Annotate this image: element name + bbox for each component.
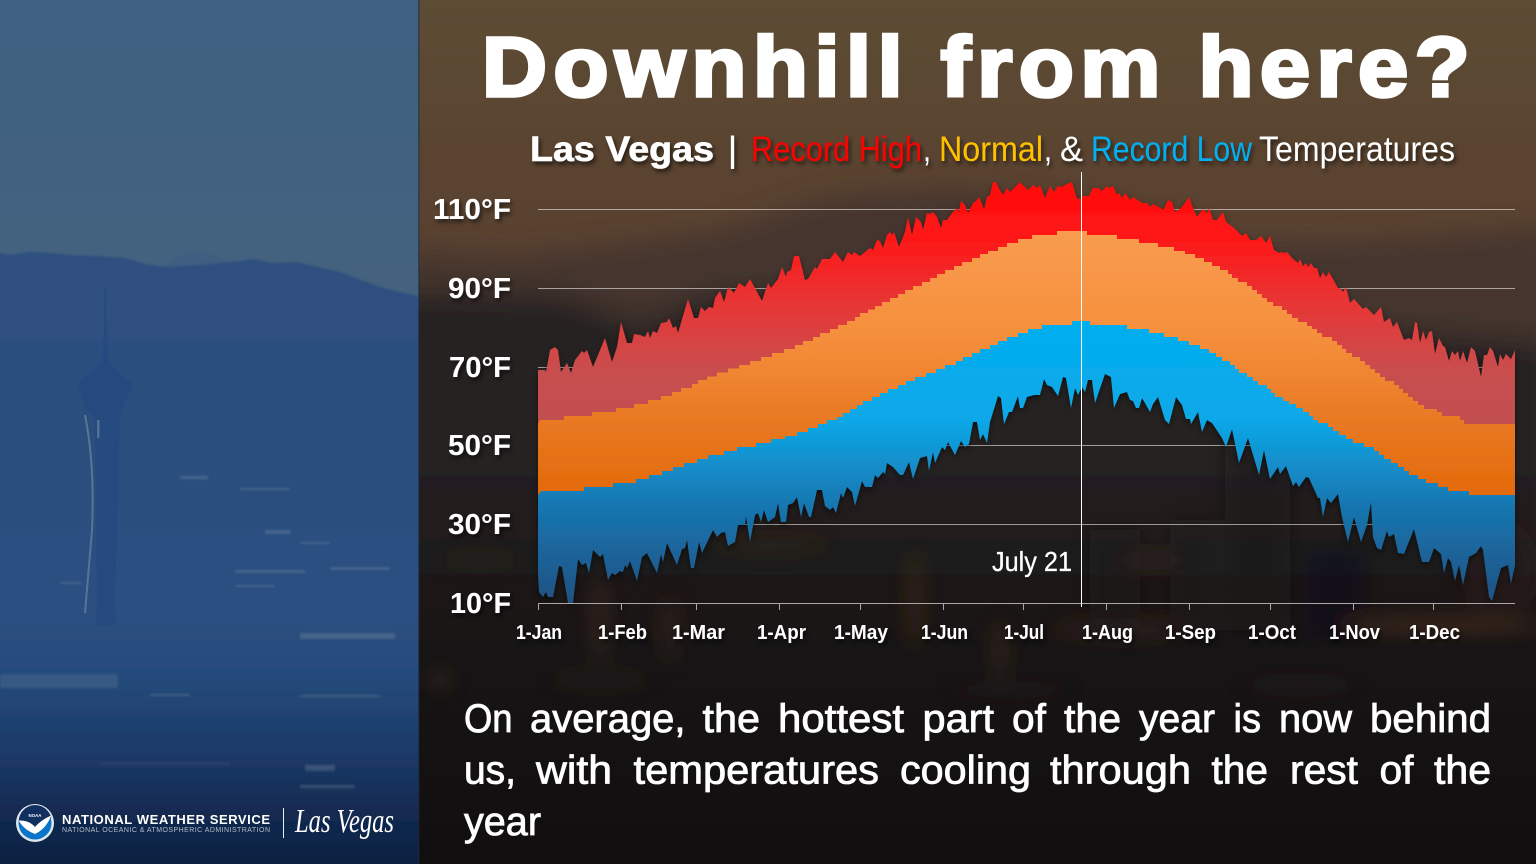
x axis month labels: 1-Jun [921, 622, 968, 644]
logo: National Weather Service Las Vegas: NATIONAL OCEANIC & ATMOSPHERIC ADMINISTRATION [62, 827, 270, 834]
body text: behind [1370, 697, 1491, 741]
body text: the [1212, 748, 1268, 792]
body text: year [1139, 697, 1215, 741]
subtitle: Record Low [1091, 130, 1253, 169]
x axis month labels: 1-Mar [672, 622, 725, 644]
body text: us, [464, 748, 516, 792]
y axis labels: 70°F [449, 352, 511, 384]
body text: rest [1290, 748, 1358, 792]
panel: blurred city background [380, 0, 1536, 864]
x axis month labels: 1-Aug [1082, 622, 1133, 644]
body text: the [1434, 748, 1491, 792]
script label: Las Vegas [294, 803, 394, 840]
x axis month labels: 1-Apr [757, 622, 806, 644]
subtitle: Record High [751, 130, 922, 169]
x axis month labels: 1-Oct [1248, 622, 1296, 644]
x axis month labels: 1-Nov [1329, 622, 1381, 644]
y axis labels: 110°F [433, 194, 511, 226]
logo: National Weather Service Las Vegas [16, 803, 394, 842]
band: record low [538, 280, 1515, 603]
x axis month labels [516, 622, 1460, 644]
body text: is [1234, 697, 1261, 741]
subtitle: Normal [939, 130, 1043, 169]
subtitle: | [729, 130, 736, 169]
x axis month labels: 1-Jan [516, 622, 562, 644]
y axis labels: 50°F [448, 430, 511, 462]
city lights [0, 476, 395, 788]
body text: On [464, 697, 512, 741]
body text [464, 697, 1491, 844]
annotation: July 21: July 21 [992, 546, 1072, 577]
marker line: July 21 [1081, 172, 1082, 607]
icon: NOAA seal: NOAA [28, 813, 42, 818]
subtitle: , [1044, 130, 1052, 169]
wordmark: NATIONAL WEATHER SERVICE [62, 812, 270, 827]
x axis month labels: 1-Feb [598, 622, 647, 644]
x axis line and ticks [538, 603, 1515, 610]
body text: the [702, 697, 760, 741]
divider between panels [418, 0, 420, 864]
subtitle: Temperatures [1259, 130, 1455, 169]
body text: of [1012, 697, 1047, 741]
y axis labels [433, 194, 511, 620]
x axis month labels: 1-May [834, 622, 889, 644]
y axis labels: 90°F [448, 273, 511, 305]
icon: tower silhouette [84, 287, 108, 613]
gridlines [538, 210, 1515, 524]
panel: hazy Stratosphere tower photo [0, 0, 424, 864]
body text: hottest [778, 697, 904, 741]
area chart: record high, normal, record low temperatures [538, 182, 1515, 603]
body text: cooling [900, 748, 1031, 792]
body text: now [1279, 697, 1352, 741]
subtitle: , [923, 130, 931, 169]
subtitle: Las Vegas [530, 130, 714, 169]
body text: temperatures [634, 748, 879, 792]
body text: the [1064, 697, 1121, 741]
y axis labels: 30°F [448, 509, 511, 541]
band: record high [538, 182, 1515, 450]
body text: year [464, 800, 541, 844]
body text: of [1380, 748, 1414, 792]
x axis month labels: 1-Jul [1004, 622, 1044, 644]
subtitle: & [1060, 130, 1083, 169]
title: Downhill from here? [482, 21, 1470, 114]
body text: part [922, 697, 994, 741]
band: normal range [538, 231, 1515, 495]
subtitle [530, 130, 1455, 169]
y axis labels: 10°F [450, 588, 511, 620]
body text: through [1050, 748, 1191, 792]
x axis month labels: 1-Sep [1165, 622, 1216, 644]
x axis month labels: 1-Dec [1409, 622, 1460, 644]
body text: with [535, 748, 612, 792]
icon: NOAA seal [16, 804, 54, 842]
body text: average, [530, 697, 686, 741]
